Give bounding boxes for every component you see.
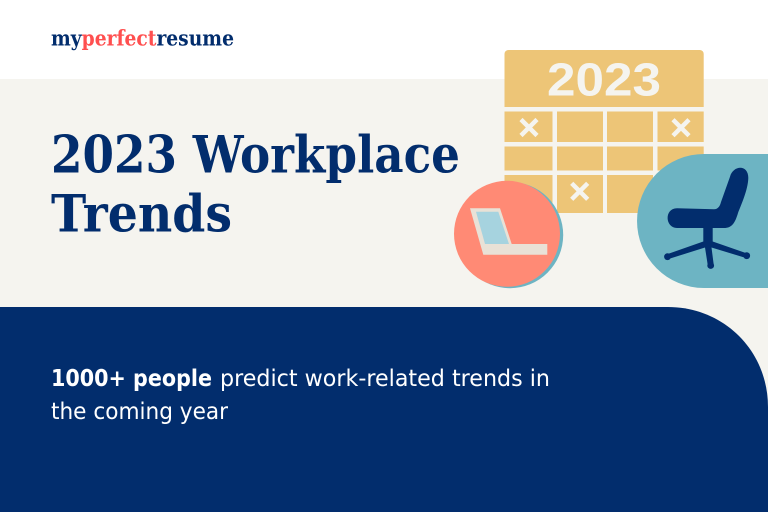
icon: calendar bbox=[504, 50, 704, 213]
icon: chair bbox=[637, 154, 768, 288]
title bbox=[51, 126, 460, 244]
subtitle bbox=[51, 366, 550, 425]
icon: calendar: 2023 bbox=[547, 54, 661, 106]
icon: laptop bbox=[454, 181, 563, 288]
title: Trends bbox=[51, 184, 232, 244]
subtitle: predict work-related trends in bbox=[220, 366, 550, 392]
title: 2023 Workplace bbox=[51, 126, 460, 186]
subtitle: 1000+ people bbox=[51, 366, 212, 392]
navy panel bbox=[0, 307, 768, 512]
logo: myperfectresume bbox=[51, 26, 234, 50]
subtitle: the coming year bbox=[51, 399, 229, 425]
